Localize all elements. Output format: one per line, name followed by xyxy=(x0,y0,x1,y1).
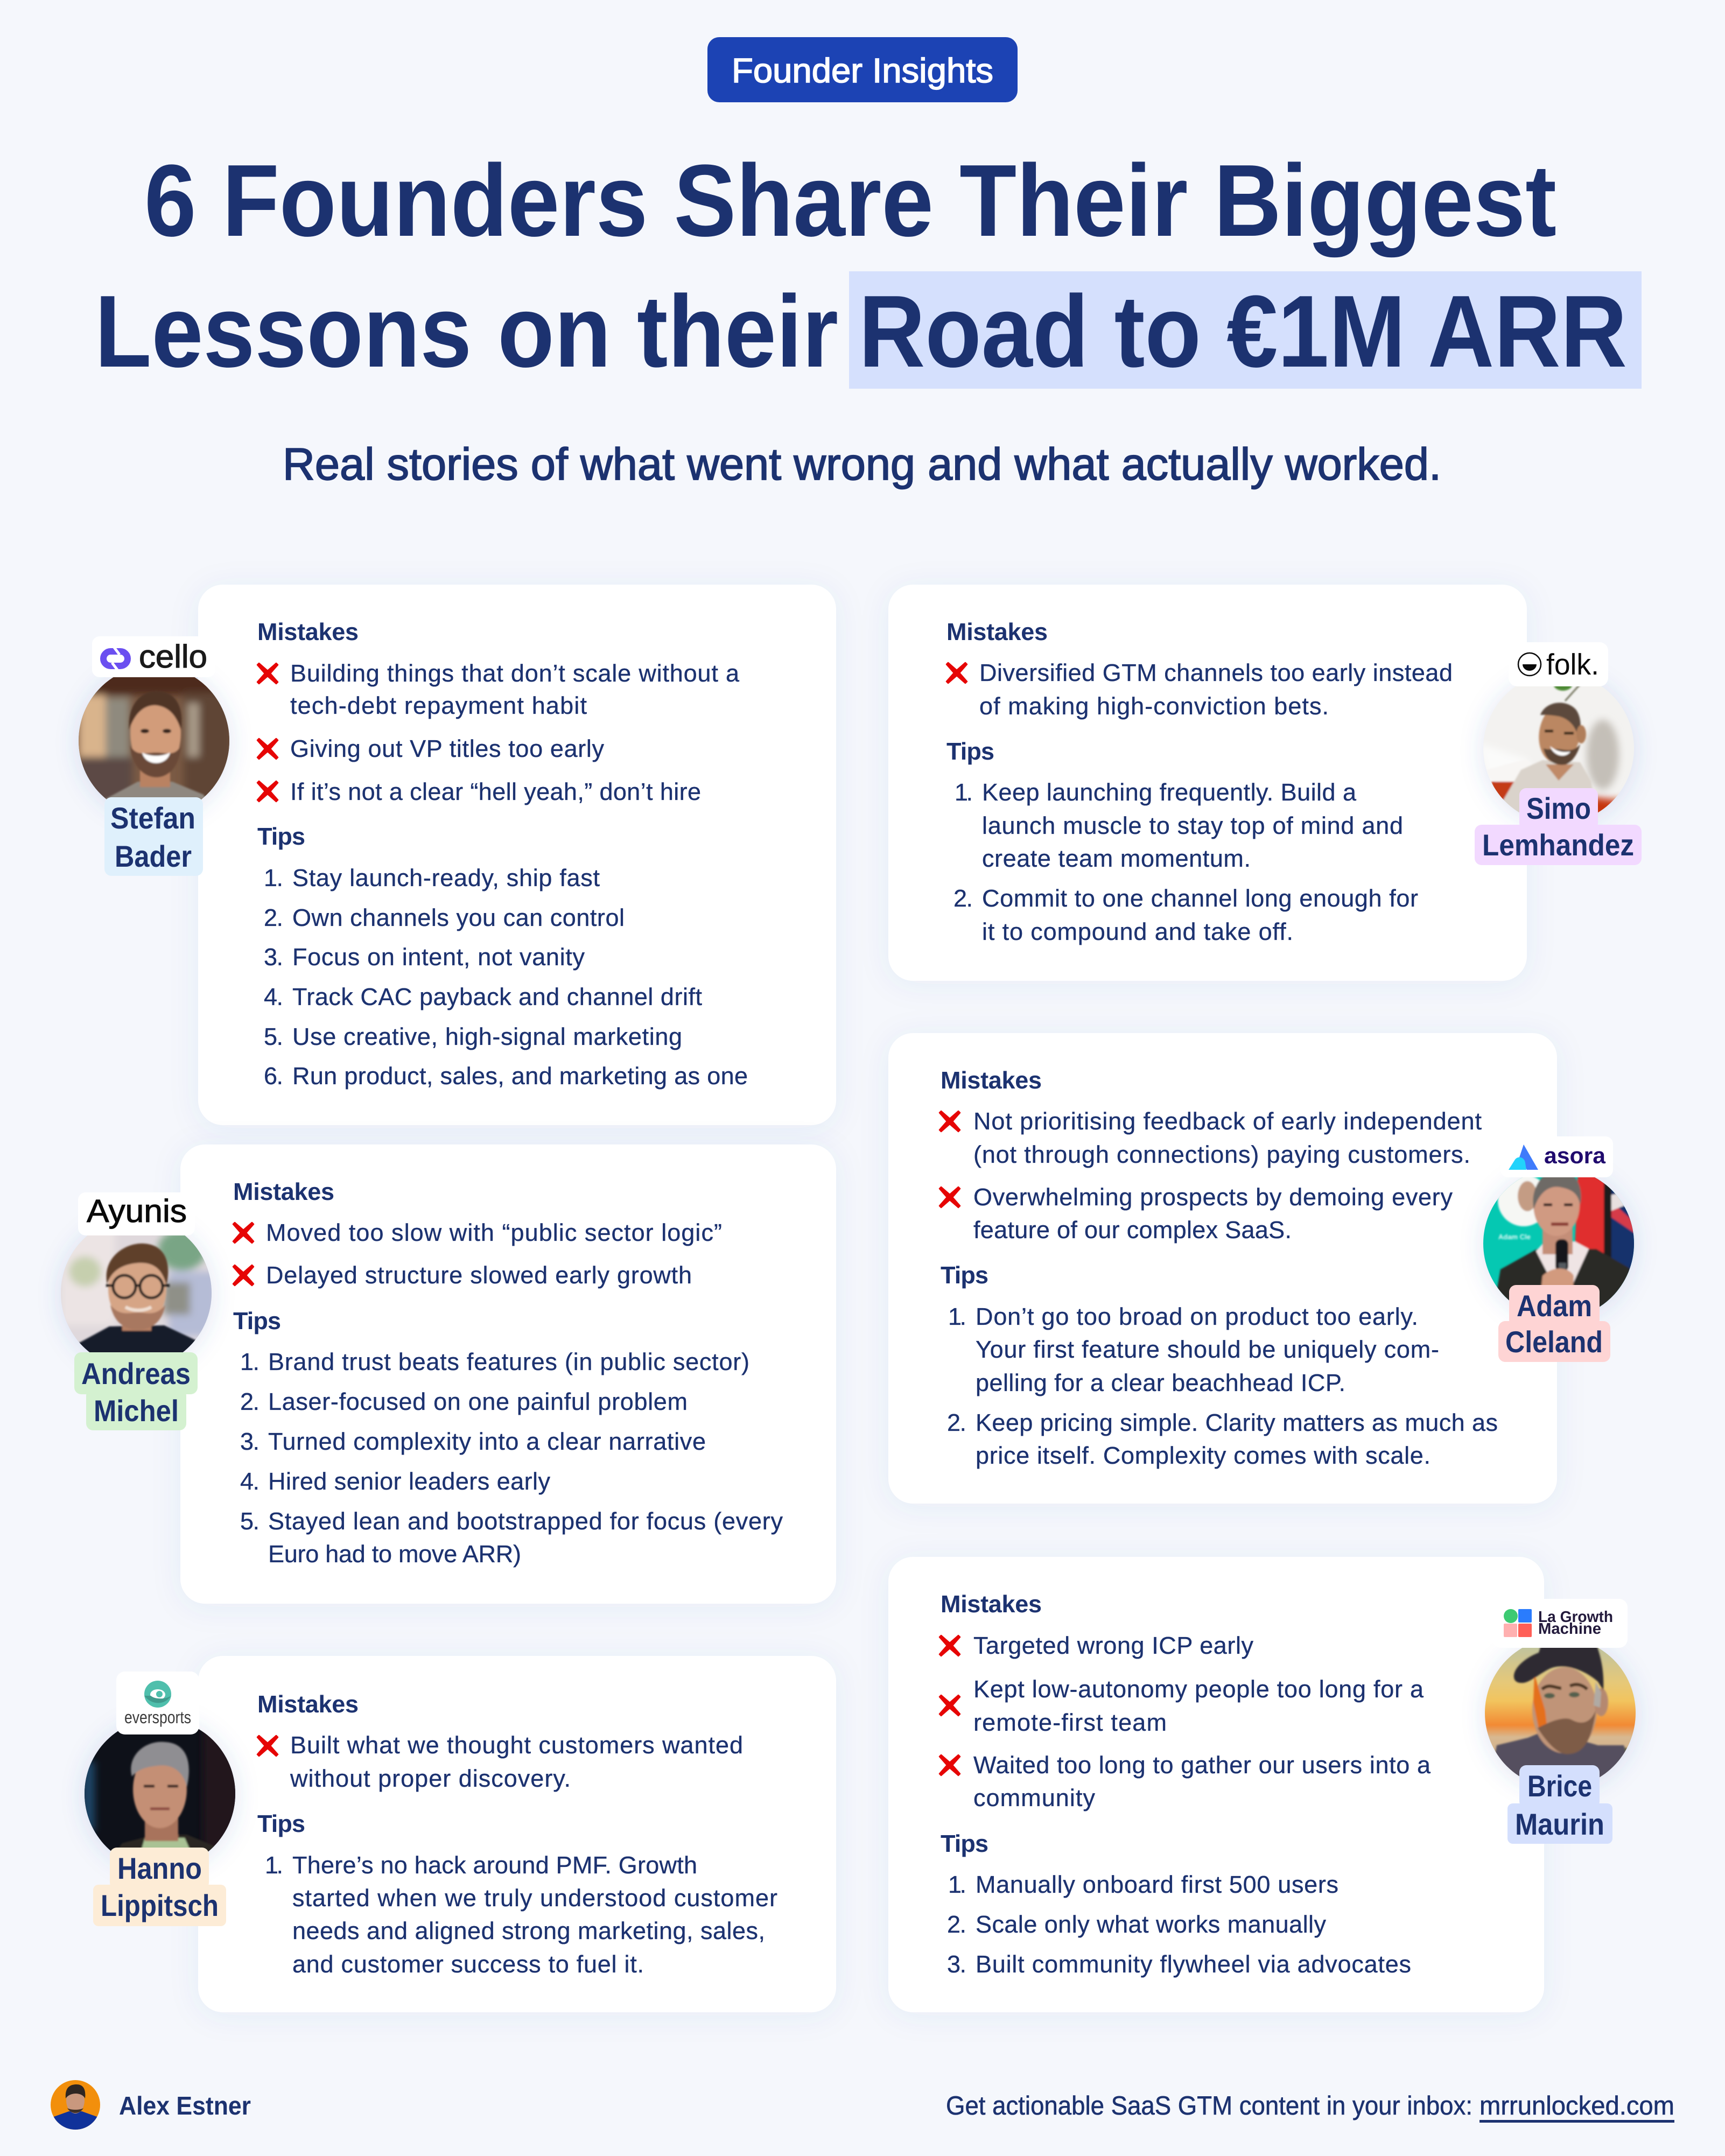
tips list: Built community flywheel via advocates xyxy=(976,1950,1411,1978)
heading: mistakes: Mistakes xyxy=(946,618,1048,645)
tips list: 3. xyxy=(264,943,283,971)
tips list xyxy=(947,1303,1498,1469)
photo: Simo Lemhandez xyxy=(1483,686,1634,813)
logo: La Growth Machine xyxy=(1492,1599,1628,1648)
mistakes list: Overwhelming prospects by demoing every xyxy=(973,1183,1453,1211)
title xyxy=(95,144,1642,389)
tips list: started when we truly understood customer xyxy=(292,1884,777,1912)
mistakes list: (not through connections) paying customers. xyxy=(973,1141,1470,1168)
tips list: pelling for a clear beachhead ICP. xyxy=(976,1369,1345,1396)
name tag: Stefan Bader: Bader xyxy=(115,839,192,873)
tips list: Keep launching frequently. Build a xyxy=(982,778,1357,806)
icon: author avatar xyxy=(51,2080,100,2130)
name tag: Andreas Michel xyxy=(74,1352,198,1430)
name tag: Adam Cleland xyxy=(1498,1285,1610,1362)
tips list: 2. xyxy=(947,1409,966,1436)
tips list: 2. xyxy=(953,884,973,912)
logo: folk xyxy=(1509,642,1608,686)
mistakes list: community xyxy=(973,1784,1095,1811)
tips list: 4. xyxy=(264,983,283,1010)
founder: Andreas Michel xyxy=(58,1192,217,1430)
name tag: Hanno Lippitsch: Lippitsch xyxy=(101,1888,219,1922)
panel: Brice Maurin lessons xyxy=(888,1557,1544,2012)
mistakes list: Building things that don’t scale without a xyxy=(290,659,740,687)
photo: Stefan Bader xyxy=(79,677,229,800)
tips list xyxy=(240,1348,783,1568)
heading: mistakes: Mistakes xyxy=(941,1066,1042,1094)
tips list xyxy=(953,778,1418,945)
mistakes list: Targeted wrong ICP early xyxy=(973,1632,1253,1659)
photo: Brice Maurin xyxy=(1485,1635,1636,1791)
tips list: Own channels you can control xyxy=(292,904,625,931)
tips list xyxy=(264,864,748,1090)
panel: Stefan Bader lessons xyxy=(198,585,836,1125)
name tag: Hanno Lippitsch xyxy=(93,1848,226,1926)
title: 6 Founders Share Their Biggest xyxy=(144,144,1556,258)
tips list: There’s no hack around PMF. Growth xyxy=(292,1851,697,1879)
heading: tips: Tips xyxy=(257,823,305,850)
name tag: Hanno Lippitsch: Hanno xyxy=(117,1851,202,1885)
tips list: Use creative, high-signal marketing xyxy=(292,1023,682,1050)
name tag: Brice Maurin: Brice xyxy=(1527,1769,1592,1803)
tips list: Hired senior leaders early xyxy=(268,1467,550,1495)
tips list: and customer success to fuel it. xyxy=(292,1950,644,1978)
tips list: 1. xyxy=(948,1871,966,1898)
heading: mistakes: Mistakes xyxy=(941,1590,1042,1618)
logo: Ayunis: Ayunis xyxy=(87,1193,187,1229)
founder: Adam Cleland xyxy=(1483,1136,1637,1362)
tips list: 3. xyxy=(947,1950,966,1978)
subtitle: Real stories of what went wrong and what actually worked. xyxy=(283,439,1441,489)
name tag: Stefan Bader: Stefan xyxy=(110,801,195,835)
mistakes list xyxy=(257,1731,743,1792)
panel: Simo Lemhandez lessons xyxy=(888,585,1527,981)
tips list: Don’t go too broad on product too early. xyxy=(976,1303,1418,1330)
logo: asora: asora xyxy=(1544,1143,1606,1168)
logo: eversports: eversports xyxy=(124,1708,191,1727)
tips list: Manually onboard first 500 users xyxy=(976,1871,1338,1898)
heading: mistakes: Mistakes xyxy=(257,1690,359,1718)
panel: Hanno Lippitsch lessons xyxy=(198,1656,836,2012)
tips list: Stay launch-ready, ship fast xyxy=(292,864,600,891)
mistakes list: remote-first team xyxy=(973,1709,1167,1736)
badge: Founder Insights xyxy=(707,37,1018,102)
heading: tips: Tips xyxy=(233,1307,281,1335)
tips list: create team momentum. xyxy=(982,845,1251,872)
logo: cello: cello xyxy=(139,638,207,675)
name tag: Adam Cleland: Adam xyxy=(1517,1289,1592,1323)
tips list xyxy=(947,1871,1411,1978)
tips list: 3. xyxy=(240,1428,260,1455)
mistakes list xyxy=(946,659,1453,720)
mistakes list: Not prioritising feedback of early independent xyxy=(973,1107,1482,1135)
heading: tips: Tips xyxy=(941,1261,988,1289)
name tag: Simo Lemhandez: Simo xyxy=(1526,791,1591,825)
logo: La Growth Machine: Machine xyxy=(1538,1620,1601,1638)
panel: Andreas Michel lessons xyxy=(180,1144,836,1604)
heading: tips: Tips xyxy=(946,738,994,765)
footer: call to action: mrrunlocked.com xyxy=(1479,2091,1674,2120)
mistakes list: Delayed structure slowed early growth xyxy=(266,1261,692,1289)
tips list: 2. xyxy=(947,1911,966,1938)
name tag: Brice Maurin: Maurin xyxy=(1515,1807,1604,1841)
tips list: 5. xyxy=(264,1023,283,1050)
tips list: price itself. Complexity comes with scale. xyxy=(976,1442,1431,1469)
mistakes list xyxy=(233,1219,722,1289)
mistakes list: Diversified GTM channels too early instead xyxy=(979,659,1453,686)
logo: folk: folk. xyxy=(1546,648,1599,681)
heading: mistakes: Mistakes xyxy=(257,618,359,645)
mistakes list: Waited too long to gather our users into a xyxy=(973,1751,1431,1779)
tips list: 4. xyxy=(240,1467,260,1495)
tips list: Run product, sales, and marketing as one xyxy=(292,1062,748,1090)
name tag: Andreas Michel: Andreas xyxy=(81,1357,191,1390)
footer: author xyxy=(51,2080,251,2130)
mistakes list: without proper discovery. xyxy=(290,1765,571,1792)
tips list: Commit to one channel long enough for xyxy=(982,884,1418,912)
founder: Simo Lemhandez xyxy=(1475,642,1642,865)
tips list: Stayed lean and bootstrapped for focus (every xyxy=(268,1507,783,1535)
tips list: Focus on intent, not vanity xyxy=(292,943,585,971)
name tag: Stefan Bader xyxy=(104,797,203,876)
mistakes list: of making high-conviction bets. xyxy=(979,692,1329,720)
tips list: 1. xyxy=(948,1303,966,1330)
tips list: it to compound and take off. xyxy=(982,918,1293,945)
mistakes list: Giving out VP titles too early xyxy=(290,735,604,762)
founder: Stefan Bader xyxy=(79,636,235,876)
tips list: Track CAC payback and channel drift xyxy=(292,983,702,1010)
logo: La Growth Machine: La Growth xyxy=(1538,1609,1613,1626)
mistakes list: Moved too slow with “public sector logic” xyxy=(266,1219,722,1246)
tips list: 1. xyxy=(264,864,283,891)
tips list: Keep pricing simple. Clarity matters as much as xyxy=(976,1409,1498,1436)
name tag: Simo Lemhandez: Lemhandez xyxy=(1482,828,1634,862)
title: Road to €1M ARR xyxy=(859,275,1627,389)
photo: Adam Cleland: Adam Cle xyxy=(1498,1233,1531,1241)
tips list: Brand trust beats features (in public sector) xyxy=(268,1348,749,1375)
tips list: 1. xyxy=(265,1851,283,1879)
tips list: Turned complexity into a clear narrative xyxy=(268,1428,706,1455)
tips list: 2. xyxy=(264,904,283,931)
mistakes list: Built what we thought customers wanted xyxy=(290,1731,743,1759)
founder: Hanno Lippitsch xyxy=(82,1672,241,1926)
tips list: 1. xyxy=(955,778,973,806)
photo: Adam Cleland xyxy=(1483,1168,1637,1322)
heading: mistakes: Mistakes xyxy=(233,1178,334,1205)
tips list: Laser-focused on one painful problem xyxy=(268,1388,688,1415)
badge: Founder Insights: Founder Insights xyxy=(732,51,993,90)
name tag: Simo Lemhandez xyxy=(1475,788,1642,865)
tips list: launch muscle to stay top of mind and xyxy=(982,812,1403,839)
mistakes list: Kept low-autonomy people too long for a xyxy=(973,1675,1424,1703)
tips list: Scale only what works manually xyxy=(976,1911,1327,1938)
photo: Hanno Lippitsch xyxy=(85,1729,235,1852)
logo: eversports xyxy=(116,1672,199,1734)
tips list: Your first feature should be uniquely com- xyxy=(976,1336,1439,1363)
tips list: 5. xyxy=(240,1507,260,1535)
tips list: needs and aligned strong marketing, sales, xyxy=(292,1917,765,1944)
mistakes list: feature of our complex SaaS. xyxy=(973,1216,1292,1244)
panel: Adam Cleland lessons xyxy=(888,1033,1557,1504)
logo: asora xyxy=(1500,1136,1613,1177)
mistakes list xyxy=(257,659,740,805)
name tag: Brice Maurin xyxy=(1507,1765,1612,1844)
photo: Andreas Michel xyxy=(61,1235,212,1352)
tips list: Euro had to move ARR) xyxy=(268,1540,521,1568)
mistakes list xyxy=(939,1632,1431,1811)
founder: Brice Maurin xyxy=(1485,1599,1636,1844)
author name: Alex Estner xyxy=(119,2092,251,2120)
heading: tips: Tips xyxy=(257,1810,305,1837)
tips list: 6. xyxy=(264,1062,283,1090)
logo: cello xyxy=(92,636,215,677)
logo: Ayunis xyxy=(78,1192,195,1235)
heading: tips: Tips xyxy=(941,1830,988,1857)
name tag: Adam Cleland: Cleland xyxy=(1505,1325,1603,1359)
name tag: Andreas Michel: Michel xyxy=(94,1394,179,1428)
mistakes list xyxy=(939,1107,1482,1244)
tips list: 1. xyxy=(240,1348,260,1375)
mistakes list: tech-debt repayment habit xyxy=(290,692,587,719)
tips list: 2. xyxy=(240,1388,260,1415)
tips list xyxy=(265,1851,777,1978)
title: Lessons on their xyxy=(95,275,838,389)
mistakes list: If it’s not a clear “hell yeah,” don’t hire xyxy=(290,778,701,805)
footer: call to action: Get actionable SaaS GTM content in your inbox: xyxy=(946,2091,1472,2120)
